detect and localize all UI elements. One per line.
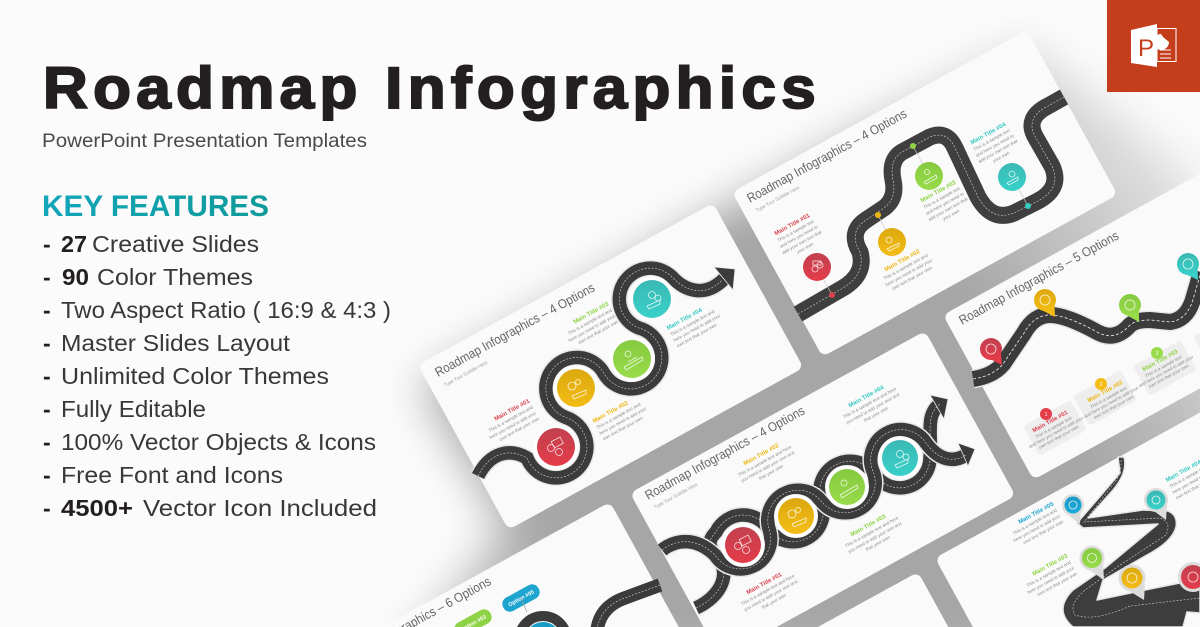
panel: slide card 5, perspective road [935,396,1200,627]
card background [732,30,1118,357]
text block 05: here you need to add your [1013,513,1061,543]
pin: teal [1144,488,1168,520]
feature list: 4500+ [61,495,133,521]
icon disc: red [533,424,579,470]
text block 03: own text that your own [577,319,620,345]
option box 1: Main Title #01 [1032,410,1070,434]
icon disc: red [803,253,831,281]
option box 1 [1022,400,1087,456]
text block 04: This is a sample text and here [842,386,898,419]
road with arrow [478,267,735,478]
text block 03: This is a sample text and here [844,515,900,548]
icon disc: teal [998,163,1026,191]
text block 03: This is a sample text and [567,307,613,336]
text block 02: own text that your own [891,265,933,291]
text block 04: and here you need to [975,133,1015,158]
text block 02 [734,438,799,489]
text block 03: Main Title #03 [850,514,888,538]
text block 03: own text that your own [1036,571,1079,597]
text block 04: This is a sample text and [669,308,716,337]
text block 04 [666,301,725,348]
option box 3: 3 [1156,351,1159,357]
text block 03: add your own text that [927,196,969,222]
option box 2: Main Title #02 [1087,380,1125,404]
pin: yellow [1118,564,1146,600]
text block 05: Main Title #05 [1018,501,1056,526]
title: Roadmap Infographics [43,56,821,121]
icon disc: yellow [878,228,906,256]
icon disc: yellow [553,365,599,411]
option box 3: Main Title #03 [1142,349,1180,373]
text block 02: own text that your own [602,415,644,441]
road [798,97,1064,314]
feature list: Color Themes [97,264,253,290]
option box 2: This is a sample text [1089,385,1128,409]
subtitle: PowerPoint Presentation Templates [42,130,367,152]
icon disc: green [915,162,943,190]
text block 01: your own [796,241,815,255]
feature list: - [43,363,51,389]
pin: red [1178,562,1200,592]
feature list: - [43,396,51,422]
pin: green [1119,294,1141,322]
feature list: 27 [61,231,87,257]
text block 04 [1165,453,1200,500]
pin: green [1080,546,1104,580]
feature list: Vector Icon Included [143,495,377,521]
text block 04 [839,380,904,431]
slide heading: Roadmap Infographics – 4 Options [432,280,598,380]
text block 03: here you need to add your [1027,565,1075,595]
text block 01 [737,567,802,618]
option pill 05 [500,582,542,614]
panel: slide card 2, road with markers [732,30,1118,357]
text block 02 [592,394,651,441]
option box 3 [1132,340,1197,396]
text block 05: This is a sample text and [1012,507,1058,536]
text block 04: Main Title #04 [666,307,704,332]
icon disc: red [721,523,765,567]
text block 04: add your own text that [977,138,1019,164]
text block 04: own text that your own [676,322,718,348]
feature list: Two Aspect Ratio ( 16:9 & 4:3 ) [61,297,391,323]
card background [630,331,1016,627]
text block 03 [1020,553,1079,601]
option pill 03 [452,607,494,627]
text block 01: Main Title #01 [494,398,532,423]
text block 01: This is a sample text and [488,404,534,433]
PowerPoint badge [1107,0,1200,92]
feature list: - [43,429,51,455]
text block 03: that your own [865,534,891,552]
text block 03: and here you need to [925,191,965,216]
feature list: - [43,297,51,323]
slide subtitle: Type Your Subtitle Here [755,185,801,214]
option box 2: 2 [1100,382,1103,388]
option box 1: and here you need to add your [1028,415,1085,449]
text block 01: that your own [761,592,787,610]
option box 1: own text that your own [1038,424,1080,450]
text block 01: Main Title #01 [774,213,812,237]
slide subtitle: Type Your Subtitle Here [443,360,489,389]
text block 02: This is a sample text and here [737,444,793,477]
feature list: Fully Editable [61,396,206,422]
text block 01: and here you need to [779,224,819,249]
pin: yellow [1034,289,1056,317]
card background [418,203,804,530]
option box 1: This is a sample text [1034,415,1073,439]
option box 3: and here you need to add your [1138,354,1195,388]
text block 03: your own [942,208,961,222]
text block 03: Main Title #03 [920,180,958,204]
feature list: - [43,231,51,257]
text block 04: Main Title #04 [848,385,886,409]
pin: blue [1062,494,1084,524]
icon disc: yellow [774,494,818,538]
feature list: 90 [62,264,89,290]
slide heading: Roadmap Infographics – 4 Options [642,403,808,503]
text block 04: here you need to add your [673,313,721,343]
text block 01: Main Title #01 [746,572,784,596]
text block 04: your own [992,150,1011,164]
text block 02: here you need to add your [885,257,933,287]
option box 2: and here you need to add your [1083,385,1140,419]
text block 04: Main Title #04 [970,122,1008,146]
road [597,585,660,627]
text block 05: own text that your own [1022,519,1065,545]
text block 01: This is a sample text [776,218,815,243]
panel: slide card 4, road with pins [943,153,1200,480]
text block 02: Main Title #02 [743,443,781,467]
text block 03 [841,509,906,560]
text block 01: here you need to add your [489,410,537,440]
text block 04 [968,120,1022,170]
feature list: Master Slides Layout [61,330,291,356]
text block 04: This is a sample text [972,127,1011,152]
icon disc: teal [878,436,922,480]
icon disc: green [609,336,655,382]
text block 03: here you need to add your [568,313,616,343]
feature list: 100% Vector Objects & Icons [61,429,376,455]
option box 2: own text that your own [1093,394,1135,420]
perspective road [1063,457,1200,627]
text block 02: This is a sample text and [595,401,642,430]
icon disc: green [825,465,869,509]
pin: red [980,338,1002,365]
text block 03: This is a sample text [922,185,961,210]
option box 4 [1193,310,1200,366]
background shadow beneath slides [395,45,1200,627]
text block 03: Main Title #03 [573,301,611,326]
icon disc: teal [629,276,675,322]
text block 03 [561,301,620,349]
feature list: Free Font and Icons [61,462,283,488]
feature list: Unlimited Color Themes [61,363,329,389]
card background [943,153,1200,480]
text block 02: here you need to add your [599,406,647,436]
card background [315,502,701,627]
text block 04: that your own [863,405,889,423]
option box 3: own text that your own [1148,363,1190,389]
option pill 05: Option #05 [508,589,535,608]
text block 04: you need to add your own text [845,391,901,425]
text block 02: Main Title #02 [592,400,630,425]
panel: slide card 7 [623,572,1009,627]
text block 02: Main Title #02 [884,249,922,273]
road [973,272,1200,379]
option box 1: 1 [1045,412,1048,418]
text block 03: Main Title #03 [1032,553,1070,578]
text block 01: you need to add your own text [743,578,799,612]
text block 03: you need to add your own text [847,520,903,554]
text block 01: add your own text that [781,229,823,255]
text block 02: that your own [758,463,784,481]
back road strand with upper arrow [696,395,948,608]
panel: slide card 3, interlaced roads [630,331,1016,627]
text block 02 [878,246,937,293]
text block 05 [1006,501,1065,549]
text block 03: This is a sample text and [1026,559,1072,588]
heading: key features: KEY FEATURES [42,190,269,223]
panel: slide card 1, winding road [418,203,804,530]
text block 01 [772,211,826,261]
option box 3: This is a sample text [1144,354,1183,378]
ring road and disc [519,598,567,627]
feature list: - [43,462,51,488]
marker connectors and dots [817,143,1031,298]
slide heading: Roadmap Infographics – 5 Options [956,228,1122,328]
feature list: - [43,264,51,290]
text block 02: This is a sample text and [883,252,929,281]
text block 02: you need to add your own text [740,449,796,483]
feature list: Creative Slides [92,231,259,257]
text block 01: own text that your own [498,416,541,442]
pin: teal [1177,253,1199,280]
panel: slide card 6, six options [315,502,701,627]
front road strand with lower arrow [662,430,975,569]
text block 03 [918,178,972,228]
option box 2 [1073,370,1142,426]
feature list [43,231,391,521]
PowerPoint badge: P [1138,35,1154,62]
feature list: - [43,495,51,521]
slide subtitle: Type Your Subtitle Here [653,482,699,511]
slide heading: Roadmap Infographics – 4 Options [744,106,910,206]
text block 01 [482,398,541,446]
card background [935,396,1200,627]
feature list: - [43,330,51,356]
text block 01: This is a sample text and here [740,573,796,606]
